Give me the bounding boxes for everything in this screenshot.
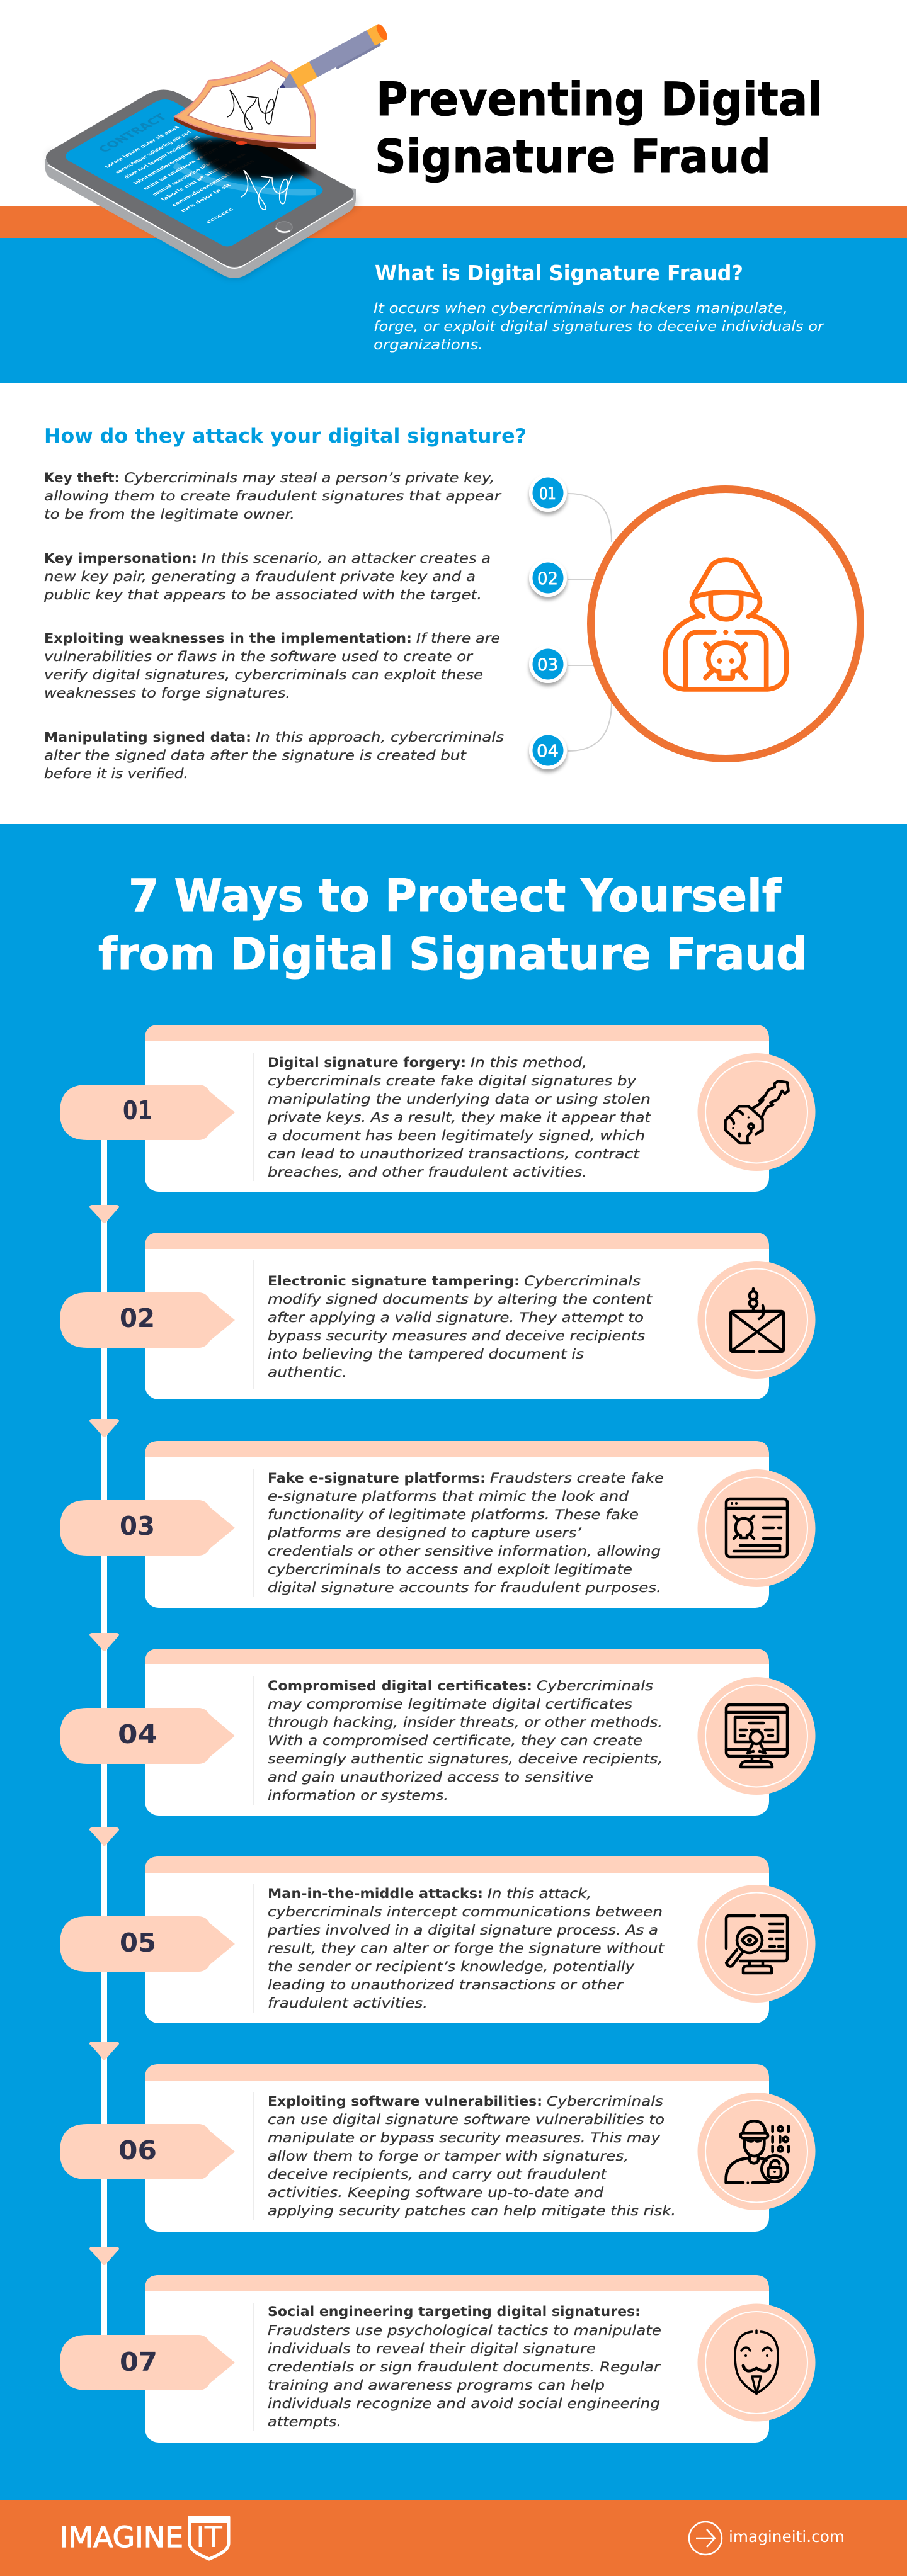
blue section background	[0, 824, 907, 2500]
text: fake e-signature platforms: credentials or other sensitive information, allowing	[268, 1544, 661, 1559]
text: exploiting software vulnerabilities: deceive recipients, and carry out fraudulent	[268, 2167, 607, 2182]
text: exploiting software vulnerabilities: Exploiting software vulnerabilities:	[268, 2094, 542, 2109]
text: electronic signature tampering: Electronic signature tampering:	[268, 1274, 520, 1289]
attack method: key impersonation	[43, 551, 491, 602]
tablet cast shadow	[50, 151, 356, 276]
number badge 02	[529, 559, 567, 597]
number badge 02: 02	[537, 569, 558, 589]
heading: how do they attack: How do they attack your digital signature?	[44, 425, 527, 448]
text: compromised digital certificates: may compromise legitimate digital certificates	[268, 1697, 632, 1712]
tablet contract text: consectetuer adipiscing elit sed	[114, 130, 193, 174]
icon circle 04	[698, 1677, 815, 1795]
text: digital signature forgery: manipulating the underlying data or using stolen	[268, 1092, 651, 1107]
text: exploiting software vulnerabilities: applying security patches can help mitigate this risk.	[268, 2203, 676, 2218]
intro text	[374, 301, 825, 353]
card 01: digital signature forgery	[60, 1025, 815, 1192]
text: compromised digital certificates: Compromised digital certificates:	[268, 1678, 532, 1693]
text: exploiting software vulnerabilities: activities. Keeping software up-to-date and	[268, 2185, 604, 2200]
text: social engineering targeting digital signatures: individuals recognize and avoid social engineering	[268, 2396, 660, 2411]
attack method: key impersonation: Key impersonation:	[44, 551, 197, 566]
text: electronic signature tampering: modify signed documents by altering the content	[268, 1292, 653, 1307]
arrow 5	[89, 2042, 119, 2060]
tablet contract text	[95, 112, 256, 224]
number tag 02	[60, 1292, 235, 1348]
text: exploiting software vulnerabilities	[268, 2094, 676, 2218]
text: man-in-the-middle attacks: result, they can alter or forge the signature without	[268, 1941, 665, 1956]
title: Preventing Digital	[376, 73, 823, 127]
icon: masked hacker with binary and padlock	[726, 2121, 789, 2184]
number badge 04: 04	[537, 742, 559, 761]
section title: 7 Ways to Protect Yourself	[128, 870, 782, 922]
tablet contract text: commodoconsequatDuisaute	[170, 159, 256, 207]
text: digital signature forgery: can lead to unauthorized transactions, contract	[268, 1146, 640, 1161]
number tag 03	[60, 1500, 235, 1556]
text: digital signature forgery: a document has been legitimately signed, which	[268, 1128, 645, 1143]
text: fake e-signature platforms: e-signature platforms that mimic the look and	[268, 1489, 629, 1504]
number tag 01	[60, 1085, 235, 1140]
attack method: key theft: to be from the legitimate owner.	[44, 507, 295, 522]
number tag 02: 02	[120, 1303, 155, 1333]
attack method: exploiting weaknesses: verify digital signatures, cybercriminals can exploit these	[44, 667, 483, 682]
section title	[98, 870, 807, 980]
text: compromised digital certificates: With a compromised certificate, they can create	[268, 1733, 642, 1748]
text: social engineering targeting digital signatures: training and awareness programs can help	[268, 2378, 605, 2393]
text: man-in-the-middle attacks: In this attack,	[488, 1886, 591, 1901]
number tag 04: 04	[118, 1719, 157, 1749]
number tag 07	[60, 2335, 235, 2390]
attack method: key theft: allowing them to create fraudulent signatures that appear	[44, 489, 502, 504]
home button	[276, 222, 292, 233]
footer band	[0, 2500, 907, 2576]
icon: monitor with certificate	[726, 1705, 787, 1767]
text: man-in-the-middle attacks: parties involved in a digital signature process. As a	[267, 1923, 658, 1938]
hacker circle	[591, 489, 860, 759]
attack method: exploiting weaknesses	[44, 631, 500, 701]
icon circle 02	[698, 1261, 815, 1379]
attack method: key impersonation: new key pair, generating a fraudulent private key and a	[44, 569, 476, 584]
text: social engineering targeting digital signatures: Fraudsters use psychological tactics to manipulate	[268, 2323, 661, 2338]
text: digital signature forgery: In this method,	[471, 1055, 587, 1070]
attack method: manipulating signed data: before it is verified.	[44, 766, 188, 781]
text: fake e-signature platforms: Fake e-signature platforms:	[268, 1471, 486, 1486]
icon circle 05	[698, 1885, 815, 2003]
number tag 07: 07	[120, 2347, 157, 2377]
text: digital signature forgery: cybercriminals create fake digital signatures by	[268, 1073, 637, 1088]
text: compromised digital certificates: through hacking, insider threats, or other methods.	[268, 1715, 663, 1730]
text: exploiting software vulnerabilities: allow them to forge or tamper with signatures,	[268, 2149, 629, 2164]
text: compromised digital certificates: seemingly authentic signatures, deceive recipients,	[268, 1751, 663, 1766]
arrow 4	[89, 1827, 119, 1846]
card 05: man-in-the-middle attacks	[60, 1856, 815, 2023]
logo shield	[188, 2516, 230, 2559]
number tag 05: 05	[120, 1928, 156, 1958]
number badge 03	[529, 645, 567, 683]
text: exploiting software vulnerabilities: manipulate or bypass security measures. This may	[268, 2130, 661, 2145]
icon circle 06	[698, 2093, 815, 2210]
attack method: exploiting weaknesses: If there are	[416, 631, 500, 646]
arrow 3	[89, 1633, 119, 1651]
number tag 04	[60, 1708, 235, 1764]
text: man-in-the-middle attacks: fraudulent activities.	[268, 1996, 428, 2011]
attack method: key impersonation: In this scenario, an attacker creates a	[202, 551, 491, 566]
title	[375, 73, 823, 184]
attack method: manipulating signed data	[44, 730, 504, 781]
text: social engineering targeting digital signatures: individuals to reveal their digital signature	[268, 2341, 596, 2356]
text: digital signature forgery: breaches, and other fraudulent activities.	[268, 1165, 587, 1180]
attack method: key theft: Key theft:	[44, 470, 120, 485]
number tag 03: 03	[120, 1511, 155, 1541]
text: digital signature forgery: private keys. As a result, they make it appear that	[267, 1110, 651, 1125]
hero orange band	[0, 206, 907, 238]
text: electronic signature tampering: after applying a valid signature. They attempt to	[268, 1310, 644, 1325]
text: social engineering targeting digital signatures: attempts.	[268, 2414, 341, 2429]
number tag 05	[60, 1916, 235, 1972]
connectors to hacker circle	[568, 494, 612, 751]
text: exploiting software vulnerabilities: can use digital signature software vulnerabilities to	[268, 2112, 665, 2127]
illustration: tablet with signature shield and pen	[45, 23, 391, 278]
website link: imagineiti.com	[729, 2528, 845, 2546]
tablet contract text: Lorem ipsum dolor sit amet	[103, 125, 181, 169]
pen	[275, 23, 391, 98]
text: compromised digital certificates: and gain unauthorized access to sensitive	[268, 1770, 593, 1785]
text: fake e-signature platforms: cybercriminals to access and exploit legitimate	[268, 1562, 632, 1577]
attack method: exploiting weaknesses: weaknesses to forge signatures.	[44, 686, 290, 701]
text: man-in-the-middle attacks: cybercriminals intercept communications between	[268, 1904, 663, 1919]
card 06: exploiting software vulnerabilities	[60, 2064, 815, 2232]
website link	[689, 2522, 845, 2555]
number tag 06	[60, 2124, 235, 2179]
text: social engineering targeting digital signatures: Social engineering targeting digital signatures:	[268, 2304, 641, 2319]
text: man-in-the-middle attacks: leading to unauthorized transactions or other	[268, 1977, 624, 1992]
text: compromised digital certificates: information or systems.	[268, 1788, 448, 1803]
number badge 01	[529, 474, 567, 512]
text: fake e-signature platforms: functionality of legitimate platforms. These fake	[268, 1507, 639, 1522]
intro text: It occurs when cybercriminals or hackers manipulate,	[374, 301, 788, 317]
tablet contract text: laboreetdoloremagnaaliquam	[132, 139, 214, 185]
tablet contract text: CONTRACT	[95, 112, 170, 154]
text: man-in-the-middle attacks: the sender or recipient’s knowledge, potentially	[268, 1959, 635, 1974]
attack method: manipulating signed data: alter the signed data after the signature is created but	[44, 748, 467, 763]
icon circle 07	[698, 2304, 815, 2421]
text: fake e-signature platforms: platforms are designed to capture users’	[267, 1525, 581, 1540]
card 07: social engineering	[60, 2275, 815, 2443]
attack method: exploiting weaknesses: Exploiting weaknesses in the implementation:	[44, 631, 412, 646]
logo: imagine it: IMAGINE	[60, 2521, 183, 2554]
tablet contract text: iure dolor in sit	[180, 183, 232, 213]
tablet contract text: ccccccc	[205, 207, 235, 224]
intro text: forge, or exploit digital signatures to deceive individuals or	[374, 319, 825, 335]
arrow 1	[89, 1205, 119, 1223]
shield	[174, 61, 316, 149]
text: fake e-signature platforms: digital signature accounts for fraudulent purposes.	[268, 1580, 661, 1595]
heading: what is digital signature fraud: What is Digital Signature Fraud?	[375, 261, 743, 285]
text: man-in-the-middle attacks: Man-in-the-middle attacks:	[268, 1886, 483, 1901]
text: social engineering targeting digital signatures: credentials or sign fraudulent documents. Regular	[268, 2359, 661, 2375]
tablet contract text: laboris nisi ut aliquip ex ea	[160, 152, 247, 201]
attack method: key theft: Cybercriminals may steal a person’s private key,	[124, 470, 494, 485]
text: social engineering targeting digital signatures	[268, 2304, 661, 2429]
tablet contract text: diam nod tempor incididunt ut	[123, 135, 202, 179]
icon: hooded hacker with skull	[666, 560, 786, 689]
icon: guy fawkes mask	[735, 2330, 778, 2394]
number tag 01: 01	[123, 1095, 152, 1126]
card 03: fake e-signature platforms	[60, 1441, 815, 1608]
text: compromised digital certificates: Cybercriminals	[537, 1678, 653, 1693]
text: electronic signature tampering	[268, 1274, 653, 1380]
text: compromised digital certificates	[268, 1678, 663, 1803]
number badge 04	[529, 732, 567, 769]
number badge 03: 03	[537, 655, 558, 675]
timeline line	[101, 1133, 107, 2342]
icon circle 03	[698, 1469, 815, 1587]
icon: envelope with hook	[731, 1289, 784, 1352]
hero blue panel	[0, 238, 907, 383]
tablet contract text: nostrud exercitation ullamco	[151, 157, 221, 196]
tablet body	[45, 89, 356, 278]
text: electronic signature tampering: into believing the tampered document is	[268, 1347, 584, 1362]
attack method: exploiting weaknesses: vulnerabilities or flaws in the software used to create or	[44, 649, 474, 664]
text: man-in-the-middle attacks	[267, 1886, 665, 2011]
text: digital signature forgery	[267, 1055, 651, 1180]
attack method: manipulating signed data: In this approach, cybercriminals	[256, 730, 504, 745]
text: electronic signature tampering: bypass security measures and deceive recipients	[268, 1328, 645, 1343]
card 02: electronic signature tampering	[60, 1233, 815, 1399]
card 04: compromised digital certificates	[60, 1649, 815, 1816]
attack method: key theft	[44, 470, 502, 522]
attack method: manipulating signed data: Manipulating signed data:	[44, 730, 251, 745]
logo shield: IT	[196, 2521, 223, 2554]
icon: monitor with magnifier and eye	[726, 1916, 787, 1973]
shield shadow on tablet	[174, 133, 316, 192]
text: fake e-signature platforms	[267, 1471, 664, 1595]
number badge 01: 01	[539, 484, 556, 504]
intro text: organizations.	[374, 337, 483, 353]
logo: imagine it	[60, 2516, 230, 2559]
text: electronic signature tampering: authentic.	[268, 1365, 347, 1380]
section title: from Digital Signature Fraud	[98, 929, 807, 980]
arrow 6	[89, 2247, 119, 2265]
icon: browser window with skull	[726, 1499, 787, 1557]
icon: key and die	[726, 1081, 789, 1143]
tablet contract text: enim ad minimum veniam quis	[142, 139, 233, 191]
number tag 06: 06	[118, 2135, 157, 2166]
text: digital signature forgery: Digital signature forgery:	[268, 1055, 466, 1070]
text: electronic signature tampering: Cybercriminals	[524, 1274, 641, 1289]
title: Signature Fraud	[375, 130, 771, 184]
arrow 2	[89, 1419, 119, 1437]
attack method: key impersonation: public key that appears to be associated with the target.	[43, 587, 482, 602]
icon circle 01	[698, 1053, 815, 1171]
text: exploiting software vulnerabilities: Cybercriminals	[547, 2094, 663, 2109]
signature reflection	[241, 170, 292, 210]
text: fake e-signature platforms: Fraudsters create fake	[490, 1471, 664, 1486]
